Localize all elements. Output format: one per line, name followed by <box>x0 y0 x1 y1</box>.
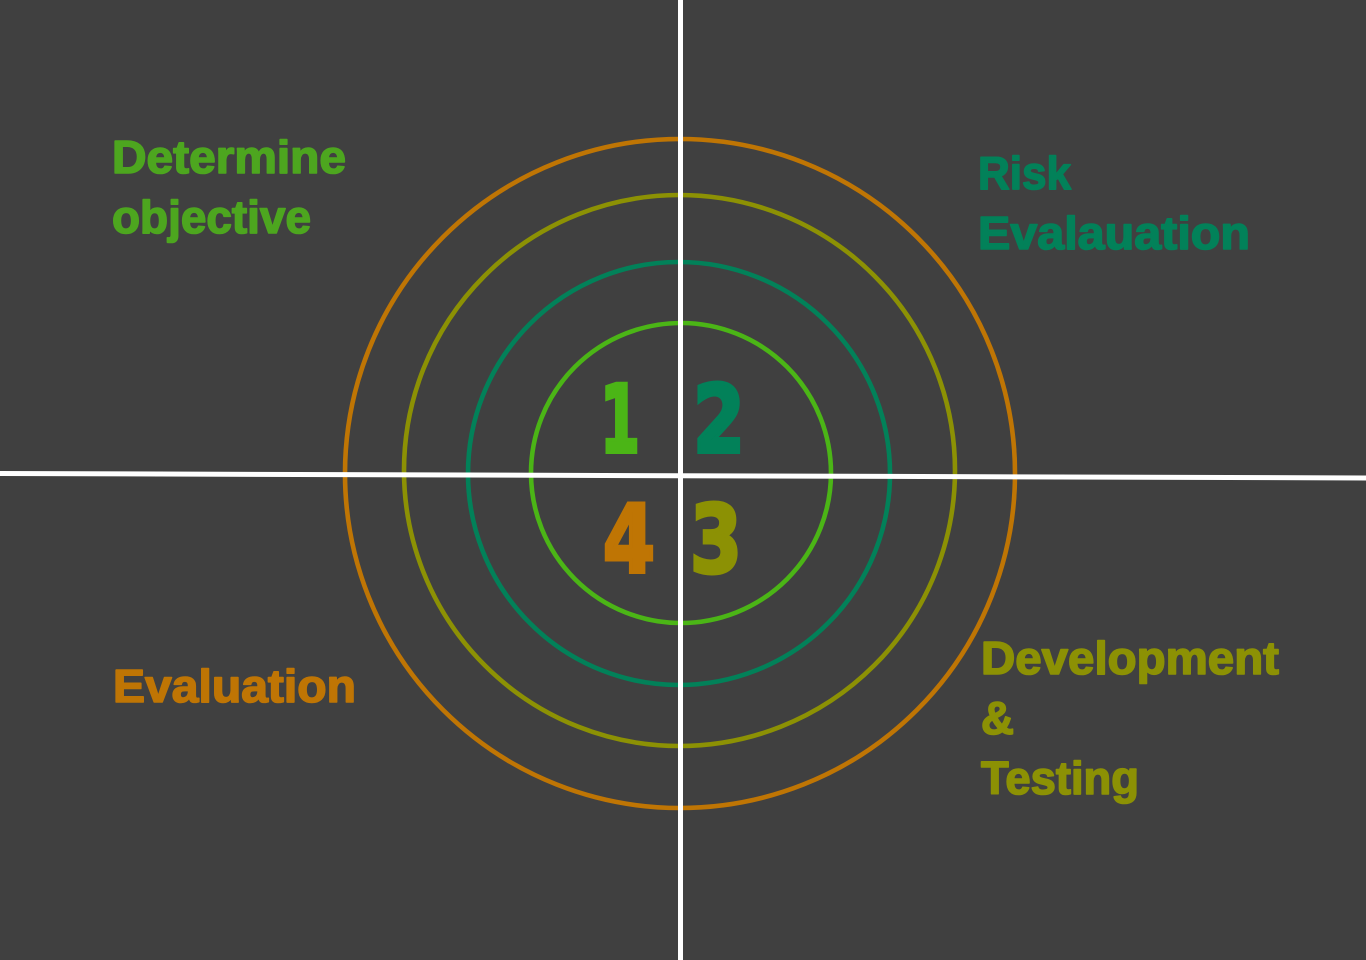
label: Determine objective: objective <box>112 191 311 243</box>
number 4: 4 <box>603 486 655 595</box>
ring: teal <box>468 262 890 685</box>
label: Evaluation: Evaluation <box>113 660 356 712</box>
label: Development & Testing: Testing <box>981 752 1139 804</box>
label: Risk Evaluation: Risk <box>978 147 1071 199</box>
spiral rings <box>345 139 1015 808</box>
label: Risk Evaluation: Evalauation <box>978 207 1250 259</box>
label: Determine objective: Determine <box>112 131 346 183</box>
label: Determine objective <box>112 131 346 243</box>
number 3: 3 <box>690 486 742 595</box>
label: Development & Testing <box>981 632 1279 804</box>
ring: inner green <box>531 323 831 623</box>
number 2: 2 <box>693 366 745 475</box>
ring: outer orange <box>345 139 1015 808</box>
ring: olive <box>404 195 955 746</box>
label: Development & Testing: & <box>981 692 1014 744</box>
vertical axis <box>678 0 683 960</box>
label: Risk Evaluation <box>978 147 1250 259</box>
number 1: 1 <box>600 366 640 475</box>
horizontal axis <box>0 474 1366 478</box>
label: Development & Testing: Development <box>981 632 1279 684</box>
